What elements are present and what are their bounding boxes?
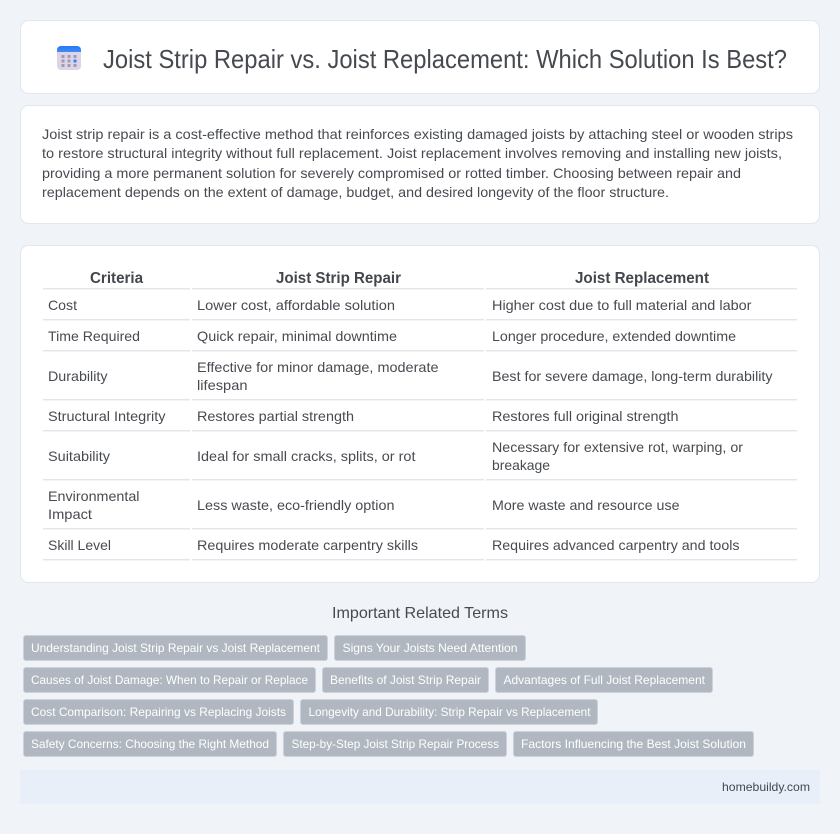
chip xyxy=(24,700,294,724)
table header row xyxy=(90,270,710,287)
heading: important related terms: Important Related Terms xyxy=(332,605,508,622)
chip xyxy=(24,668,316,692)
title: Joist Strip Repair vs. Joist Replacement: Which Solution Is Best? xyxy=(103,46,787,74)
row: durability: lifespan xyxy=(197,377,248,393)
chip: Signs Your Joists Need Attention xyxy=(342,641,518,655)
footer site name: homebuildy.com xyxy=(722,780,810,794)
row: skill level xyxy=(48,537,740,553)
row: time required: Quick repair, minimal downtime xyxy=(197,328,397,344)
chip xyxy=(496,668,712,692)
chip: Step-by-Step Joist Strip Repair Process xyxy=(292,737,499,751)
text block: introduction: to restore structural integrity without full replacement. Joist replacement involves removing and installing new joists, xyxy=(42,145,782,161)
text block: introduction: replacement depends on the extent of damage, budget, and desired longevity of the floor structure. xyxy=(42,184,669,200)
row: structural integrity: Restores partial strength xyxy=(197,408,354,424)
table header row: Criteria xyxy=(90,270,143,287)
row: time required: Time Required xyxy=(48,328,140,344)
chip xyxy=(24,636,328,660)
row: suitability: Ideal for small cracks, splits, or rot xyxy=(197,448,416,464)
row: structural integrity: Structural Integrity xyxy=(48,408,166,424)
row: suitability: Suitability xyxy=(48,448,110,464)
footer xyxy=(20,770,820,804)
panel: related term chips xyxy=(24,636,754,756)
row: cost: Cost xyxy=(48,297,77,313)
chip: Factors Influencing the Best Joist Solution xyxy=(521,737,746,751)
row: suitability: breakage xyxy=(492,457,550,473)
panel: header xyxy=(20,20,820,94)
chip xyxy=(284,732,506,756)
chip: Longevity and Durability: Strip Repair vs Replacement xyxy=(308,705,591,719)
chip: Safety Concerns: Choosing the Right Method xyxy=(31,737,269,751)
text block: introduction xyxy=(42,126,793,200)
row: time required xyxy=(48,328,736,344)
icon: calendar xyxy=(57,46,81,70)
row: environmental impact xyxy=(48,488,680,522)
panel: comparison table xyxy=(20,246,820,582)
row: skill level: Skill Level xyxy=(48,537,111,553)
text block: introduction: Joist strip repair is a cost-effective method that reinforces existing damaged joists by attaching steel or wooden strips xyxy=(42,126,793,142)
row: environmental impact: Less waste, eco-friendly option xyxy=(197,497,394,513)
table header row: Joist Strip Repair xyxy=(276,270,401,287)
chip: Cost Comparison: Repairing vs Replacing Joists xyxy=(31,705,286,719)
row: environmental impact: Environmental xyxy=(48,488,140,504)
chip xyxy=(514,732,754,756)
row: durability: Best for severe damage, long-term durability xyxy=(492,368,772,384)
chip: Causes of Joist Damage: When to Repair or Replace xyxy=(31,673,308,687)
row: durability: Durability xyxy=(48,368,108,384)
row: durability xyxy=(48,359,772,393)
row: structural integrity xyxy=(48,408,678,424)
row: skill level: Requires moderate carpentry skills xyxy=(197,537,418,553)
row: environmental impact: More waste and resource use xyxy=(492,497,680,513)
chip xyxy=(322,668,488,692)
row: cost: Higher cost due to full material and labor xyxy=(492,297,752,313)
row: cost: Lower cost, affordable solution xyxy=(197,297,395,313)
chip xyxy=(300,700,598,724)
chip: Advantages of Full Joist Replacement xyxy=(504,673,706,687)
row: skill level: Requires advanced carpentry and tools xyxy=(492,537,740,553)
text block: introduction: providing a more permanent solution for severely compromised or rotted timber. Choosing between repair and xyxy=(42,165,741,181)
row: durability: Effective for minor damage, moderate xyxy=(197,359,439,375)
row: cost xyxy=(48,297,752,313)
chip xyxy=(334,636,526,660)
row: time required: Longer procedure, extended downtime xyxy=(492,328,736,344)
row: suitability: Necessary for extensive rot, warping, or xyxy=(492,439,743,455)
chip: Benefits of Joist Strip Repair xyxy=(330,673,481,687)
row: structural integrity: Restores full original strength xyxy=(492,408,678,424)
table header row: Joist Replacement xyxy=(575,270,710,287)
chip xyxy=(24,732,276,756)
row: suitability xyxy=(48,439,743,473)
panel: introduction xyxy=(20,106,820,224)
chip: Understanding Joist Strip Repair vs Joist Replacement xyxy=(31,641,321,655)
row: environmental impact: Impact xyxy=(48,506,92,522)
